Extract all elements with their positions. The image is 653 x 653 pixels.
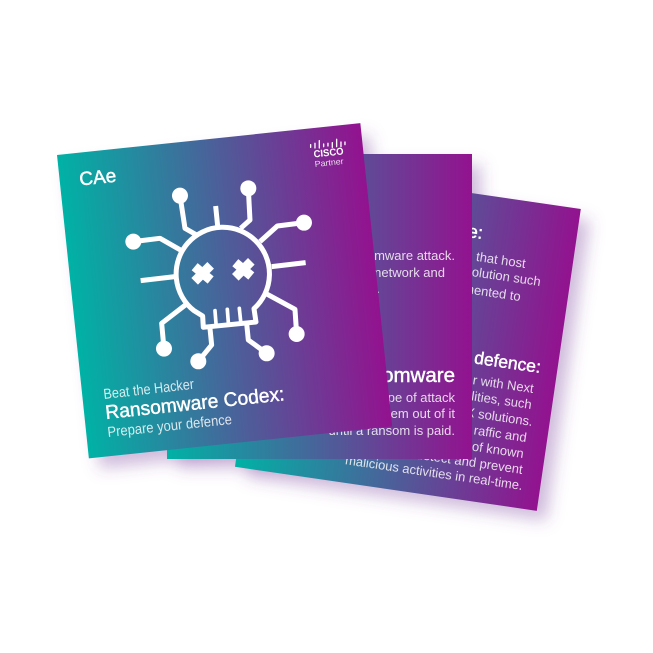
skull outline	[176, 227, 269, 327]
back card: upper paragraph: that host	[475, 249, 527, 271]
middle card: lower paragraph: type of attack	[378, 390, 455, 405]
teeth	[215, 308, 241, 323]
logo: CAE: CAe	[78, 166, 117, 190]
icon: Cisco bars	[311, 139, 345, 148]
eyes	[195, 261, 251, 281]
middle card: upper paragraph: .	[376, 281, 380, 296]
circuit traces	[133, 188, 306, 361]
middle card: lower paragraph: until a ransom is paid.	[329, 423, 455, 438]
card: front cover	[57, 123, 392, 458]
back card: lower paragraph	[344, 372, 535, 493]
logo: Cisco Partner	[311, 139, 345, 169]
middle card: lower paragraph: them out of it	[380, 406, 455, 421]
back card: upper heading: e:	[467, 221, 484, 243]
back card: lower paragraph: raffic and	[473, 422, 528, 445]
back card: upper paragraph: mented to	[462, 281, 522, 304]
back card: lower paragraph: r with Next	[472, 372, 535, 396]
middle card: upper paragraph: ransomware attack.	[342, 248, 455, 263]
back card: upper paragraph: solution such	[464, 263, 542, 289]
heading: Ransomware Codex: Ransomware Codex:	[104, 383, 286, 424]
back card: lower heading: defence:	[473, 347, 542, 377]
middle card: upper paragraph: network and	[374, 265, 445, 280]
middle card: upper paragraph	[342, 248, 455, 296]
text: Beat the Hacker: Beat the Hacker	[103, 377, 195, 403]
middle card: heading: Ransomware	[334, 364, 455, 387]
card: back (defence advice)	[235, 165, 581, 511]
middle card: lower paragraph	[329, 390, 455, 438]
card: middle (what is ransomware)	[167, 154, 472, 459]
back card: upper paragraph	[462, 249, 542, 304]
card drop shadows	[68, 135, 590, 521]
circuit nodes	[125, 180, 312, 369]
back card: lower paragraph: of known	[471, 439, 525, 461]
icon: circuit skull	[125, 180, 312, 369]
back card: lower paragraph: detect and prevent	[415, 447, 524, 477]
back card: lower paragraph: malicious activities in real-time.	[344, 452, 524, 493]
text: Prepare your defence: Prepare your defence	[107, 412, 233, 441]
text: CISCO: CISCO	[313, 146, 344, 160]
back card: lower paragraph: lities, such	[470, 388, 533, 412]
back card: lower paragraph: X solutions.	[465, 404, 534, 429]
text: Partner: Partner	[314, 156, 344, 169]
